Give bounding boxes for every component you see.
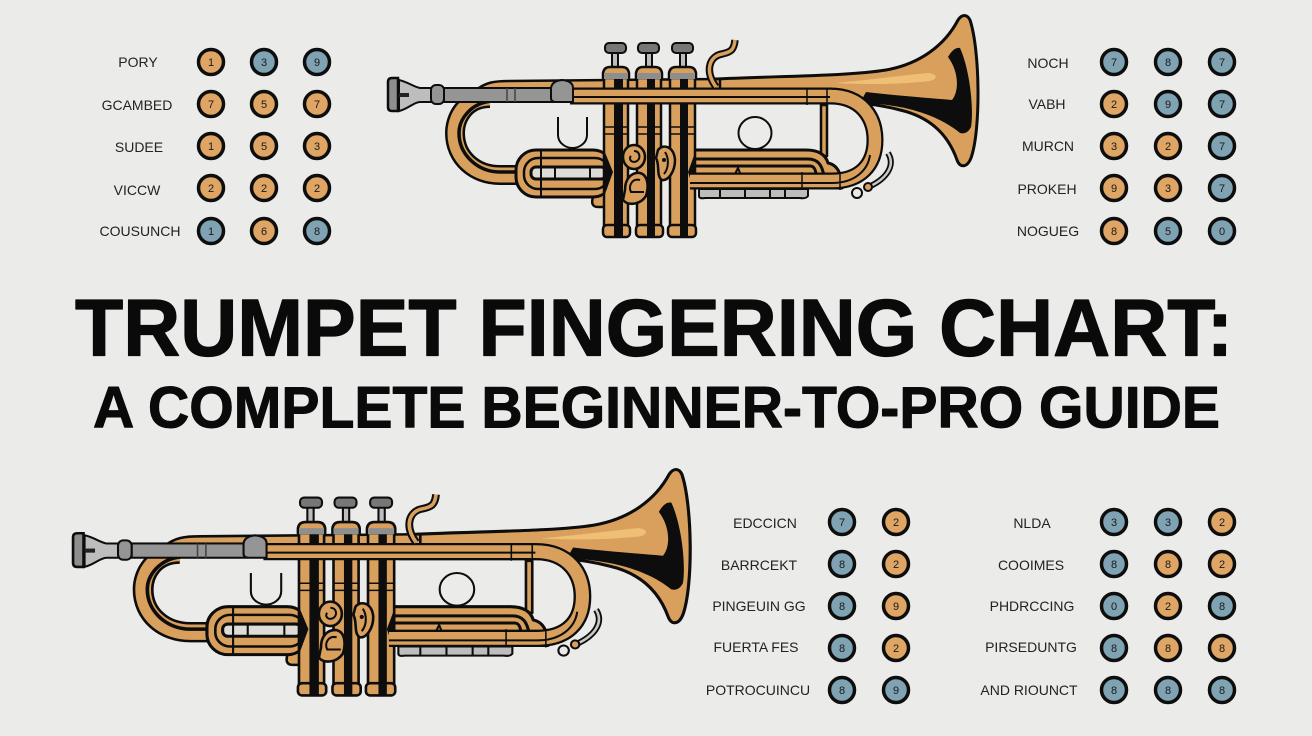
row: PIRSEDUNTG [985,636,1234,660]
panel: top right fingering rows [1017,50,1234,244]
row: PINGEUIN GG: 8 [839,601,845,613]
row: NOCH [1027,50,1234,74]
row: POTROCUINCU: 9 [893,685,899,697]
panel: top left fingering rows [100,50,330,244]
row: SUDEE: 1 [208,141,214,153]
U shaped tube [558,117,587,148]
row: GCAMBED: 5 [261,99,267,111]
row: MURCN: 2 [1165,141,1171,153]
row: COUSUNCH: 6 [261,226,267,238]
right slide [692,150,842,188]
row: VICCW [114,176,330,200]
row: SUDEE [115,134,330,158]
left slide [516,150,613,197]
row: VABH: 9 [1165,99,1171,111]
upper tube [475,79,720,91]
row: PINGEUIN GG: 9 [893,601,899,613]
row: COUSUNCH: 1 [208,226,214,238]
valve casings [603,74,696,237]
row: VABH: 2 [1111,99,1117,111]
panel: bottom right fingering rows [980,510,1234,702]
ornamental swirls [623,145,675,204]
row: VICCW: 2 [261,183,267,195]
row: PHDRCCING: 8 [1219,601,1225,613]
row: VICCW: 2 [208,183,214,195]
row: NLDA: NLDA [1013,515,1051,531]
row: EDCCICN: 2 [893,517,899,529]
row: BARRCEKT: 8 [839,559,845,571]
valve 1 [603,74,630,237]
trumpet bell [700,16,978,166]
row: EDCCICN [733,510,908,534]
row: FUERTA FES: FUERTA FES [713,639,799,655]
row: BARRCEKT [721,552,908,576]
valve 3 [668,74,696,237]
row: BARRCEKT: 2 [893,559,899,571]
row: NOCH: 7 [1111,57,1117,69]
row: POTROCUINCU: POTROCUINCU [706,682,810,698]
row: NOGUEG: NOGUEG [1017,223,1079,239]
row: VABH [1028,92,1234,116]
row: NOGUEG: 5 [1165,226,1171,238]
row: MURCN: 7 [1219,141,1225,153]
heading line 1: TRUMPET FINGERING CHART: [75,284,1233,374]
row: NOCH: NOCH [1027,55,1069,71]
row: NOGUEG [1017,218,1234,244]
row: FUERTA FES [713,636,908,660]
row: SUDEE: 3 [314,141,320,153]
row: AND RIOUNCT: 8 [1165,685,1171,697]
row: PROKEH: 9 [1111,183,1117,195]
row: COOIMES [998,552,1234,576]
water hook [709,40,735,87]
valve button 1 [603,43,629,79]
row: PROKEH: PROKEH [1017,181,1077,197]
row: NLDA [1013,510,1234,534]
panel: bottom middle fingering rows [706,510,908,702]
row: MURCN: 3 [1111,141,1117,153]
heading line 2: A COMPLETE BEGINNER-TO-PRO GUIDE [93,376,1220,440]
row: COOIMES: 8 [1111,559,1117,571]
row: POTROCUINCU: 8 [839,685,845,697]
row: PHDRCCING [990,594,1234,618]
row: NOGUEG: 0 [1219,226,1225,238]
row: PORY: 3 [261,57,267,69]
row: AND RIOUNCT: 8 [1219,685,1225,697]
lead pipe and main tuning slide [570,88,875,190]
row: PHDRCCING: PHDRCCING [990,598,1074,614]
row: PIRSEDUNTG: 8 [1165,643,1171,655]
row: AND RIOUNCT [980,678,1234,702]
row: PORY [118,50,330,74]
row: COOIMES: 8 [1165,559,1171,571]
row: GCAMBED [102,92,330,116]
row: NOGUEG: 8 [1111,226,1117,238]
valve caps and buttons [603,43,696,79]
row: NOCH: 7 [1219,57,1225,69]
mouthpiece and silver pipe [388,78,573,111]
row: POTROCUINCU [706,678,908,702]
row: PROKEH [1017,176,1234,200]
row: NLDA: 2 [1219,517,1225,529]
row: FUERTA FES: 2 [893,643,899,655]
row: PORY: 9 [314,57,320,69]
row: NLDA: 3 [1165,517,1171,529]
left tuning loop [455,98,520,175]
title [75,284,1233,440]
row: PINGEUIN GG [712,594,908,618]
row: COUSUNCH: 8 [314,226,320,238]
row: PIRSEDUNTG: 8 [1111,643,1117,655]
row: PIRSEDUNTG: 8 [1219,643,1225,655]
row: EDCCICN: EDCCICN [733,515,797,531]
row: PROKEH: 3 [1165,183,1171,195]
row: NOCH: 8 [1165,57,1171,69]
row: VICCW: VICCW [114,182,161,198]
illustration: top trumpet [388,16,978,237]
row: SUDEE: SUDEE [115,139,163,155]
row: GCAMBED: 7 [208,99,214,111]
row: COOIMES: COOIMES [998,557,1064,573]
row: PROKEH: 7 [1219,183,1225,195]
row: BARRCEKT: BARRCEKT [721,557,798,573]
illustration: bottom trumpet [73,470,690,695]
row: MURCN [1022,134,1234,158]
row: COUSUNCH: COUSUNCH [100,223,180,239]
row: VABH: 7 [1219,99,1225,111]
valve button 2 [636,43,662,79]
row: AND RIOUNCT: 8 [1111,685,1117,697]
row: NLDA: 3 [1111,517,1117,529]
valve 2 [636,74,663,237]
row: GCAMBED: GCAMBED [102,97,172,113]
row: SUDEE: 5 [261,141,267,153]
row: VICCW: 2 [314,183,320,195]
row: PHDRCCING: 0 [1111,601,1117,613]
row: PORY: PORY [118,54,158,70]
row: EDCCICN: 7 [839,517,845,529]
round ring [738,117,772,149]
row: PHDRCCING: 2 [1165,601,1171,613]
row: PINGEUIN GG: PINGEUIN GG [712,598,806,614]
row: FUERTA FES: 8 [839,643,845,655]
row: COUSUNCH [100,218,330,244]
row: COOIMES: 2 [1219,559,1225,571]
valve button 3 [669,43,696,79]
row: GCAMBED: 7 [314,99,320,111]
row: MURCN: MURCN [1022,138,1074,154]
right curl tubing [852,153,891,198]
row: PORY: 1 [208,57,214,69]
row: VABH: VABH [1028,96,1066,112]
row: PIRSEDUNTG: PIRSEDUNTG [985,639,1077,655]
vertical strut and lower details [592,105,827,207]
slide joints [603,150,696,197]
row: AND RIOUNCT: AND RIOUNCT [980,682,1078,698]
